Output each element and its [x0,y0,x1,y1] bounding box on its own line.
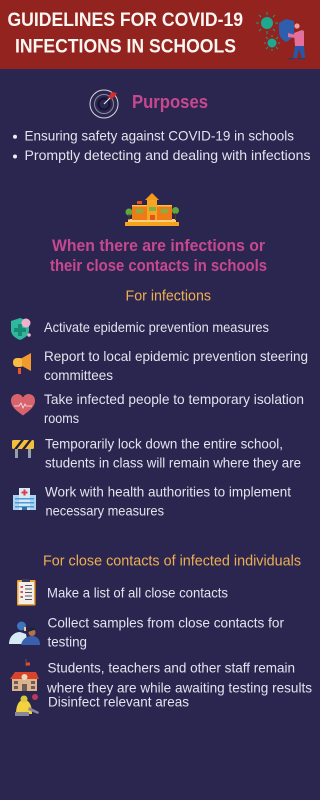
item: health authorities: Work with health authorities to implement [45,484,291,500]
icon: road barrier [12,440,34,458]
item: remain while awaiting results: where they are while awaiting testing results [46,679,312,695]
item: collect samples: testing [48,634,87,650]
subheading: for infections: For infections [126,289,211,305]
icon: person with shield and viruses [256,12,305,59]
icon: person in hazmat suit spraying [15,694,39,716]
title [8,10,243,58]
icon: school building [125,193,179,226]
purposes heading: Purposes [132,92,208,112]
section heading: When there are infections or [52,236,265,255]
icon: school with flag [10,659,39,691]
subheading: for close contacts: For close contacts of infected individuals [43,554,301,570]
item: activate measures: Activate epidemic prevention measures [44,319,269,335]
item: lock down school: students in class will remain where they are [45,455,301,471]
item: health authorities [13,484,291,519]
icon: health worker swabbing [9,622,40,645]
item: activate measures [11,318,269,340]
icon: target with dart [90,90,118,118]
icon: heart [11,394,35,416]
icon: clipboard [17,579,36,606]
item: list of contacts [17,579,228,606]
icon: megaphone [13,353,31,374]
header banner [0,0,320,69]
item: disinfect areas: Disinfect relevant areas [48,693,189,709]
item: lock down school: Temporarily lock down the entire school, [45,436,283,452]
item: collect samples [9,615,284,650]
icon: shield [11,318,31,340]
title: INFECTIONS IN SCHOOLS [15,36,236,58]
item: lock down school [12,436,301,471]
item: isolation rooms: rooms [44,410,79,426]
item: report to committees: Report to local epidemic prevention steering [44,348,308,364]
section heading: their close contacts in schools [50,256,267,275]
purposes heading [90,90,208,118]
purposes list: Ensuring safety against COVID-19 in schools [24,128,294,144]
section heading [50,236,267,275]
item: remain while awaiting results [10,659,312,695]
item: remain while awaiting results: Students, teachers and other staff remain [48,660,295,676]
item: isolation rooms: Take infected people to temporary isolation [44,391,304,407]
title: GUIDELINES FOR COVID-19 [8,10,243,31]
item: report to committees: committees [44,367,113,383]
icon: hospital [13,488,36,510]
purposes list: Promptly detecting and dealing with infections [24,147,310,163]
item: report to committees [13,348,308,383]
item: list of contacts: Make a list of all close contacts [47,584,228,600]
item: health authorities: necessary measures [46,503,164,519]
item: collect samples: Collect samples from close contacts for [48,615,284,631]
item: disinfect areas [15,693,189,716]
item: isolation rooms [11,391,304,426]
purposes list [13,128,310,163]
